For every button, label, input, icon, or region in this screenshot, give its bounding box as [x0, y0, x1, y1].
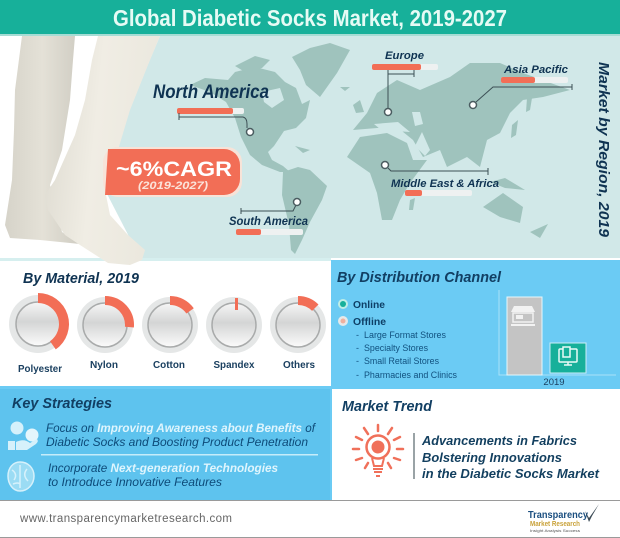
donut: others: Others: [283, 359, 315, 371]
text: market trend statement: Advancements in Fabrics: [421, 433, 577, 448]
list: offline store types: Small Retail Stores: [364, 356, 439, 366]
list: offline store types: Large Format Stores: [364, 330, 446, 340]
title banner: Global Diabetic Socks Market, 2019-2027: [113, 5, 507, 31]
region: Europe: Europe: [385, 50, 424, 62]
text: strategy two: to Introduce Innovative Features: [48, 477, 222, 489]
text: strategy two: Incorporate Next-generation Technologies: [48, 463, 278, 475]
panel: market trend: [330, 389, 600, 500]
panel: by material: [9, 271, 326, 375]
panel: by distribution channel: [331, 260, 620, 388]
donut: others: [270, 297, 326, 371]
bar chart: distribution channel share: 2019: [543, 377, 565, 388]
panel: key strategies: [0, 389, 330, 500]
donut: polyester: [9, 295, 67, 375]
text: strategy one: [46, 423, 317, 449]
list: offline store types: Specialty Stores: [364, 343, 428, 353]
region: Middle East and Africa: [382, 162, 499, 196]
donut: cotton: [142, 297, 198, 371]
text: strategy one: Focus on Improving Awareness about Benefits of: [46, 423, 317, 435]
heading: by distribution channel: By Distribution Channel: [337, 269, 502, 286]
map: inland seas: [262, 88, 430, 156]
text: market trend statement: Bolstering Innovations: [422, 450, 562, 465]
legend: online: [338, 299, 385, 311]
panel: regional world map: [105, 36, 620, 258]
icon: hand holding coins: [8, 422, 38, 450]
list: offline store types: [356, 330, 457, 380]
list: offline store types: -: [356, 356, 359, 366]
region: North America: [153, 82, 269, 136]
region: Asia Pacific: Asia Pacific: [503, 64, 568, 76]
icon: light bulb: [353, 425, 403, 476]
icon: brain: [8, 462, 34, 491]
region: Middle East and Africa: Middle East & Africa: [391, 178, 499, 190]
footer: Transparency Market Research logo: [528, 504, 599, 533]
list: offline store types: -: [356, 370, 359, 380]
donut: nylon: Nylon: [90, 359, 118, 371]
region: South America: South America: [229, 216, 309, 228]
photo: legs wearing white diabetic socks: [5, 36, 160, 265]
donut: spandex: [206, 297, 262, 371]
callout: CAGR: [103, 147, 242, 197]
region: Europe: [372, 50, 438, 116]
donut: cotton: Cotton: [153, 359, 185, 371]
callout: CAGR: ~6%CAGR: [116, 158, 232, 181]
legend: offline: [338, 316, 386, 328]
footer: Transparency Market Research logo: Market Research: [530, 519, 580, 528]
bar chart: distribution channel share: [499, 290, 616, 388]
region: South America: [229, 198, 309, 235]
region: North America: North America: [153, 82, 269, 103]
list: offline store types: -: [356, 330, 359, 340]
legend: online: Online: [353, 299, 385, 311]
text: strategy one: Diabetic Socks and Boosting Product Penetration: [46, 437, 308, 449]
icon: computer: [559, 347, 577, 365]
footer: Transparency Market Research logo: Transparency: [528, 510, 588, 521]
donut: polyester: Polyester: [18, 363, 62, 375]
title banner: [0, 0, 620, 36]
icon: store: [511, 306, 535, 326]
text: market trend statement: [421, 433, 600, 481]
region: Asia Pacific: [470, 64, 572, 108]
donut: spandex: Spandex: [214, 359, 255, 371]
legend: offline: Offline: [353, 316, 386, 328]
donut: nylon: [77, 297, 133, 371]
vertical heading: market by region: Market by Region, 2019: [595, 62, 612, 238]
footer: website URL: www.transparencymarketresearch.com: [19, 513, 232, 525]
list: offline store types: Pharmacies and Clinics: [364, 370, 457, 380]
callout: CAGR: (2019-2027): [138, 180, 208, 192]
footer: Transparency Market Research logo: Insight Analysis Success: [530, 529, 580, 533]
list: offline store types: -: [356, 343, 359, 353]
heading: key strategies: Key Strategies: [12, 396, 112, 412]
heading: by material: By Material, 2019: [23, 271, 139, 287]
map: world continents: [190, 43, 570, 254]
text: strategy two: [48, 463, 278, 489]
heading: market trend: Market Trend: [342, 398, 433, 415]
text: market trend statement: in the Diabetic Socks Market: [422, 466, 600, 481]
